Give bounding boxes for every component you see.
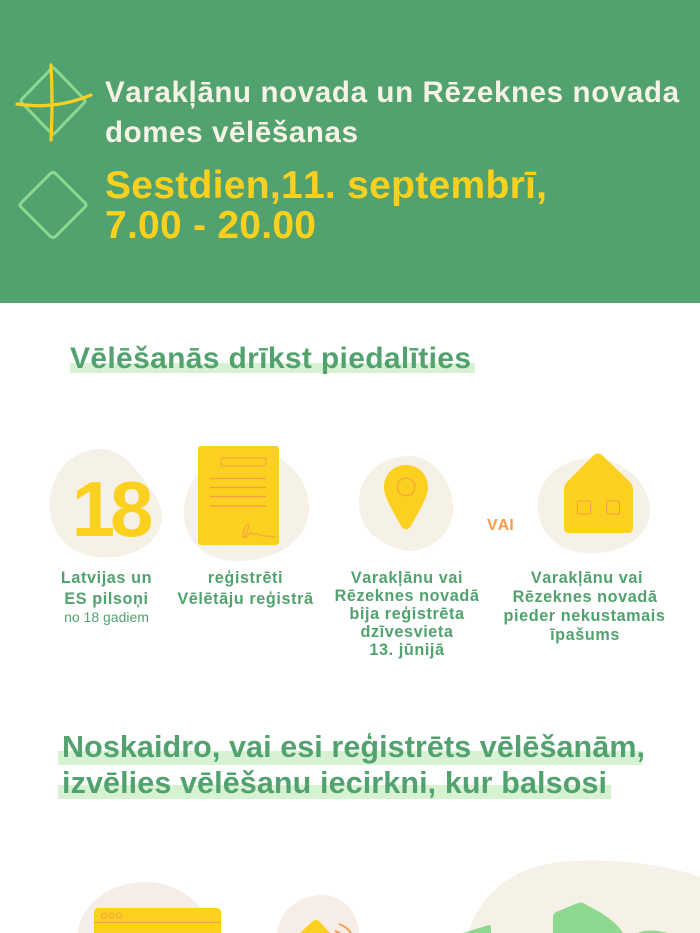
item: residence: 13. jūnijā [369, 641, 445, 659]
icon: empty ballot diamond [20, 172, 86, 238]
icon: house [564, 454, 633, 533]
illustration: map [463, 860, 700, 933]
title line 2: domes vēlēšanas [105, 116, 358, 149]
heading: check registration: Noskaidro, vai esi reģistrēts vēlēšanām, [62, 730, 645, 764]
item: residence: bija reģistrēta [349, 605, 465, 623]
item: register: Vēlētāju reģistrā [177, 590, 314, 608]
item: register [177, 446, 314, 608]
time: 7.00 - 20.00 [105, 204, 316, 247]
illustration: browser window [78, 882, 221, 933]
item: property [504, 454, 665, 644]
item: property: pieder nekustamais [504, 607, 665, 625]
icon: marked ballot diamond [17, 65, 91, 140]
item: age 18 [50, 449, 162, 625]
blob [538, 458, 650, 553]
blob [359, 456, 453, 551]
caption: Varakļānu vai [531, 569, 643, 587]
blob [184, 450, 309, 561]
number 18: 18 [72, 465, 151, 553]
blob [50, 449, 162, 558]
header panel [0, 0, 700, 303]
icon: location pin [384, 465, 428, 530]
item: residence: dzīvesvieta [361, 623, 454, 641]
icon: document [198, 446, 279, 545]
heading: check registration [58, 730, 645, 800]
heading: check registration: izvēlies vēlēšanu iecirkni, kur balsosi [62, 766, 607, 800]
title: Varakļānu novada un Rēzeknes novada [105, 76, 680, 109]
caption: Varakļānu vai [351, 569, 463, 587]
item: age 18: no 18 gadiem [64, 609, 149, 625]
caption: Latvijas un [61, 569, 152, 587]
item: property: Rēzeknes novadā [513, 588, 658, 606]
item: residence: Rēzeknes novadā [335, 587, 480, 605]
caption: reģistrēti [208, 569, 283, 587]
illustration: phone signal [277, 895, 359, 933]
heading: who may vote: Vēlēšanās drīkst piedalīties [70, 342, 471, 375]
item: residence [335, 456, 480, 659]
item: property: īpašums [549, 626, 620, 644]
label: or: VAI [487, 517, 514, 534]
item: age 18: ES pilsoņi [64, 590, 149, 608]
date: Sestdien,11. septembrī, [105, 164, 547, 207]
